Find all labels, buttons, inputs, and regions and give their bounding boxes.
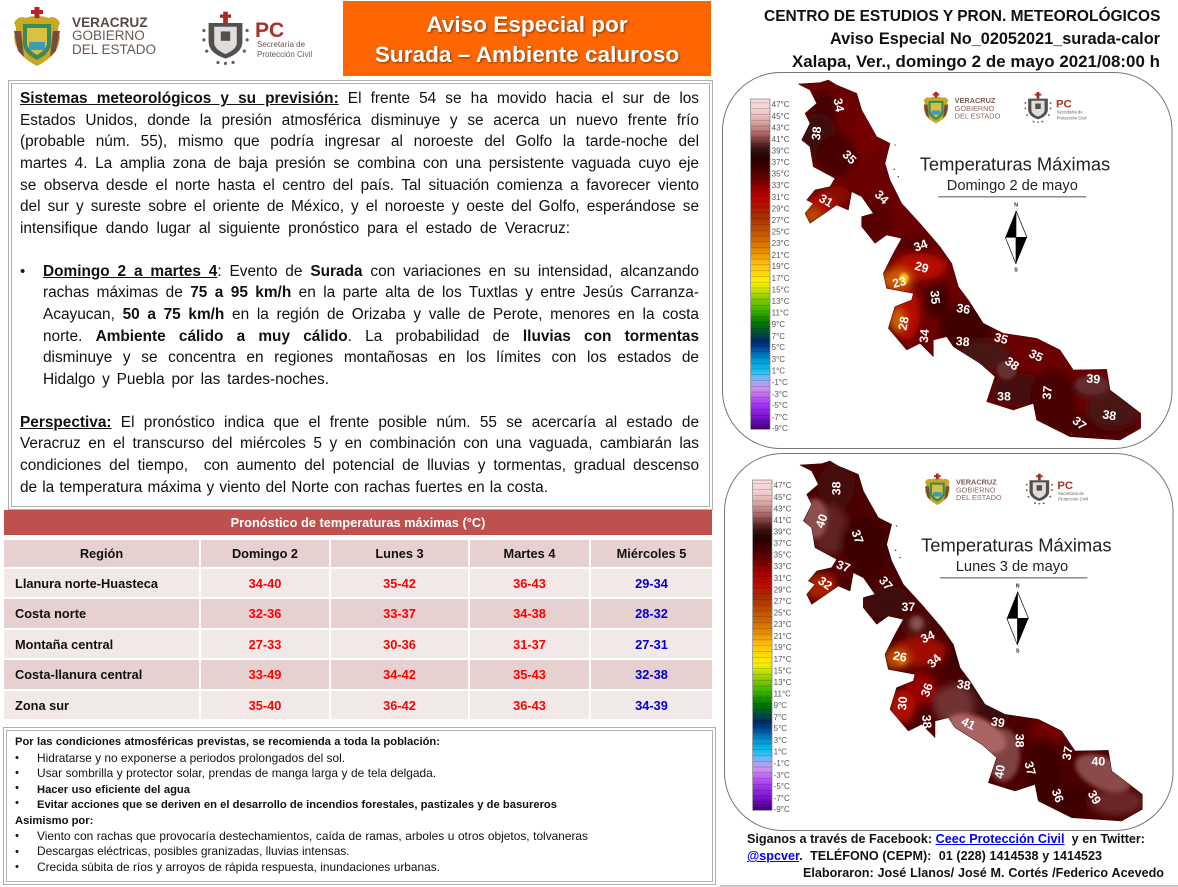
legend: temperature scale lunes: 7°C <box>774 713 787 722</box>
table title <box>4 510 712 535</box>
list: recommendations: Hidratarse y no exponerse a periodos prolongados del sol. <box>37 751 345 765</box>
legend: temperature scale: -9°C <box>772 424 788 433</box>
logo: Protección Civil: Secretaría de <box>257 40 305 49</box>
legend: temperature scale: 29°C <box>772 204 790 213</box>
table title: Pronóstico de temperaturas máximas (°C) <box>231 515 485 530</box>
logo: Veracruz Gobierno del Estado <box>14 7 156 66</box>
list: hazards: Descargas eléctricas, posibles granizadas, lluvias intensas. <box>37 844 350 858</box>
logo: Veracruz Gobierno del Estado: GOBIERNO <box>72 28 145 43</box>
title banner: Surada – Ambiente caluroso <box>375 42 679 67</box>
paragraph: sistemas meteorológicos: intensifique dando lugar al siguiente pronóstico para el estado de Veracruz: <box>20 220 570 237</box>
icon: north arrow lunes: S <box>1016 649 1020 655</box>
paragraph: sistemas meteorológicos: Sistemas meteorológicos y su previsión: El frente 54 se ha movido hacia el sur de los <box>20 90 699 107</box>
map logos domingo: Protección Civil <box>1057 115 1087 120</box>
legend: temperature scale lunes: 23°C <box>774 620 792 629</box>
legend: temperature scale: 19°C <box>772 262 790 271</box>
agency header: Aviso Especial No_02052021_surada-calor <box>830 30 1160 48</box>
paragraph: domingo 2 a martes 4: disminuye y se concentra en regiones montañosas en los límites con los estados de <box>43 349 699 366</box>
list: recommendations <box>15 751 557 811</box>
legend: temperature scale lunes <box>753 480 792 814</box>
legend: temperature scale lunes: 3°C <box>774 736 787 745</box>
logo: Protección Civil <box>202 12 312 65</box>
table: temperature forecast: 32-38 <box>635 667 668 682</box>
legend: temperature scale lunes: 27°C <box>774 597 792 606</box>
list: hazards: • <box>15 830 19 842</box>
temperature labels lunes: 38 <box>956 677 972 693</box>
legend: temperature scale lunes: 5°C <box>774 724 787 733</box>
table: temperature forecast: Región <box>80 546 123 561</box>
temperature labels domingo: 35 <box>1027 346 1045 365</box>
map title lunes <box>921 535 1112 578</box>
temperature labels domingo: 34 <box>912 237 930 255</box>
table: temperature forecast: 33-37 <box>383 606 416 621</box>
paragraph: domingo 2 a martes 4: • <box>20 263 25 280</box>
list: recommendations: Evitar acciones que se deriven en el desarrollo de incendios forestales, pastizales y de basureros <box>37 799 557 811</box>
map logos lunes: DEL ESTADO <box>956 493 1002 502</box>
temperature labels domingo: 38 <box>809 126 824 141</box>
temperature labels lunes: 37 <box>901 600 915 614</box>
legend: temperature scale: 33°C <box>772 181 790 190</box>
panel: map Domingo 2 de mayo <box>722 72 1172 449</box>
legend: temperature scale: 31°C <box>772 193 790 202</box>
temperature labels domingo: 38 <box>997 390 1011 404</box>
temperature labels lunes: 37 <box>1021 760 1039 777</box>
map logos domingo: Secretaría de <box>1057 110 1083 115</box>
legend: temperature scale lunes: 47°C <box>774 481 792 490</box>
legend: temperature scale: 11°C <box>772 308 789 317</box>
temperature labels domingo <box>809 97 1117 433</box>
table: temperature forecast: Miércoles 5 <box>617 546 686 561</box>
table: temperature forecast: 27-33 <box>249 636 281 652</box>
icon: north arrow domingo <box>1005 202 1027 274</box>
list: recommendations: Usar sombrilla y protector solar, prendas de manga larga y de tela delgada. <box>37 766 436 780</box>
legend: temperature scale: 27°C <box>772 216 790 225</box>
legend: temperature scale lunes: 35°C <box>774 550 792 559</box>
logo: Veracruz Gobierno del Estado: DEL ESTADO <box>72 42 156 57</box>
legend: temperature scale lunes: 25°C <box>774 608 792 617</box>
list: hazards: Viento con rachas que provocaría destechamientos, caída de ramas, arboles u otros objetos, tolvaneras <box>37 829 588 843</box>
logo: Protección Civil: Protección Civil <box>257 50 312 59</box>
paragraph: perspectiva: Perspectiva: El pronóstico indica que el frente posible núm. 55 se acercaría al estado de <box>20 414 699 431</box>
list: hazards: • <box>15 846 19 858</box>
map: Veracruz temperature lunes <box>787 455 1153 825</box>
list: hazards: • <box>15 861 19 873</box>
table: temperature forecast: 34-40 <box>249 576 281 590</box>
table: temperature forecast: 28-32 <box>635 606 668 621</box>
temperature labels lunes <box>813 481 1105 807</box>
table: temperature forecast: 30-36 <box>383 636 416 652</box>
map logos domingo <box>924 92 1087 123</box>
map: Veracruz temperature domingo <box>787 77 1153 447</box>
temperature labels lunes: 37 <box>834 557 852 575</box>
paragraph: domingo 2 a martes 4: rachas máximas de 75 a 95 km/h en la parte alta de los Tuxtlas y entre Jesús Carranza- <box>43 284 699 301</box>
title banner <box>343 1 711 76</box>
agency header: Xalapa, Ver., domingo 2 de mayo 2021/08:00 h <box>792 52 1160 71</box>
temperature labels lunes: 37 <box>848 528 866 546</box>
paragraph: sistemas meteorológicos: (probable núm. 55), mismo que podría ingresar al noroeste del Golfo la tarde-noche del <box>20 133 699 150</box>
temperature labels lunes: 40 <box>992 764 1008 780</box>
legend: temperature scale lunes: 33°C <box>774 562 792 571</box>
panel: recommendations: Por las condiciones atmosféricas previstas, se recomienda a toda la población: <box>15 736 440 748</box>
temperature labels domingo: 29 <box>913 259 930 276</box>
temperature labels lunes: 37 <box>876 574 896 593</box>
paragraph: perspectiva: de la temperatura máxima y viento del Norte con rachas fuertes en la costa. <box>20 479 548 496</box>
logo: Protección Civil: PC <box>255 19 284 42</box>
legend: temperature scale: 25°C <box>772 227 790 236</box>
temperature labels lunes: 41 <box>959 714 978 733</box>
legend: temperature scale: 39°C <box>772 146 790 155</box>
legend: temperature scale lunes: 37°C <box>774 539 792 548</box>
panel: forecast text <box>8 80 713 510</box>
table: temperature forecast: 33-49 <box>249 667 281 682</box>
table: temperature forecast: 36-43 <box>513 576 546 590</box>
paragraph: perspectiva: Veracruz en el transcurso del miércoles 5 y en combinación con una vaguada, cambiarán las <box>20 435 699 452</box>
temperature labels domingo: 37 <box>1070 414 1089 433</box>
temperature labels lunes: 39 <box>990 714 1006 730</box>
legend: temperature scale lunes: -9°C <box>774 805 790 814</box>
paragraph: domingo 2 a martes 4 <box>20 263 699 388</box>
legend: temperature scale lunes: 9°C <box>774 701 787 710</box>
temperature labels domingo: 23 <box>891 274 908 291</box>
list: recommendations: • <box>15 767 19 779</box>
table: temperature forecast: 29-34 <box>635 576 668 590</box>
legend: temperature scale lunes: 31°C <box>774 574 792 583</box>
temperature labels lunes: 38 <box>1012 734 1026 748</box>
temperature labels domingo: 31 <box>817 191 836 210</box>
legend: temperature scale lunes: 29°C <box>774 585 792 594</box>
legend: temperature scale lunes: 19°C <box>774 643 792 652</box>
temperature labels lunes: 40 <box>813 512 831 530</box>
legend: temperature scale lunes: 21°C <box>774 632 792 641</box>
temperature labels lunes: 34 <box>925 651 944 671</box>
table: temperature forecast: 36-43 <box>513 698 546 712</box>
table: temperature forecast: Montaña central <box>15 636 113 652</box>
table: temperature forecast <box>4 540 712 719</box>
table: temperature forecast: 35-42 <box>383 576 416 590</box>
legend: temperature scale: 23°C <box>772 239 790 248</box>
paragraph: domingo 2 a martes 4: Domingo 2 a martes 4: Evento de Surada con variaciones en su intensidad, alcanzando <box>43 263 699 280</box>
list: hazards <box>15 829 588 874</box>
legend: temperature scale lunes: -7°C <box>774 794 790 803</box>
table: temperature forecast: 35-43 <box>513 667 546 682</box>
temperature labels lunes: 38 <box>919 714 934 729</box>
temperature labels domingo: 37 <box>1040 385 1055 400</box>
paragraph: domingo 2 a martes 4: Hidalgo y Puebla por las tardes-noches. <box>43 371 329 388</box>
title banner: Aviso Especial por <box>426 12 628 37</box>
map logos lunes: VERACRUZ <box>956 478 997 487</box>
icon: north arrow domingo: S <box>1014 268 1018 274</box>
temperature labels lunes: 39 <box>1085 788 1104 807</box>
map title domingo <box>920 154 1110 197</box>
map title lunes: Lunes 3 de mayo <box>956 559 1068 575</box>
table: temperature forecast: Martes 4 <box>504 546 555 561</box>
legend: temperature scale: 3°C <box>772 355 785 364</box>
paragraph: domingo 2 a martes 4: norte. Ambiente cálido a muy cálido. La probabilidad de lluvias con tormentas <box>43 328 699 345</box>
map logos lunes: Secretaría de <box>1058 491 1085 496</box>
list: recommendations: • <box>15 797 19 809</box>
temperature labels domingo: 35 <box>840 148 859 167</box>
table: temperature forecast: 32-36 <box>249 606 281 621</box>
table: temperature forecast: Costa norte <box>15 606 86 621</box>
temperature labels domingo: 34 <box>872 188 892 207</box>
map logos domingo: GOBIERNO <box>955 104 994 113</box>
temperature labels domingo: 38 <box>1101 407 1117 423</box>
paragraph: sistemas meteorológicos <box>20 90 699 237</box>
temperature labels lunes: 30 <box>895 696 910 711</box>
temperature labels domingo: 34 <box>831 97 847 113</box>
table: temperature forecast: 34-39 <box>635 698 668 712</box>
legend: temperature scale: 17°C <box>772 274 790 283</box>
map logos domingo: PC <box>1056 98 1072 110</box>
map logos domingo: DEL ESTADO <box>955 111 1001 120</box>
legend: temperature scale lunes: 13°C <box>774 678 792 687</box>
legend: temperature scale: -3°C <box>772 390 788 399</box>
legend: temperature scale: -1°C <box>772 378 788 387</box>
table: temperature forecast: 36-42 <box>383 698 416 712</box>
paragraph: domingo 2 a martes 4: Acayucan, 50 a 75 km/h en la región de Orizaba y valle de Perote, menores en la costa <box>43 306 699 323</box>
footer: contact and credits <box>747 832 1164 880</box>
footer: contact and credits: Elaboraron: José Llanos/ José M. Cortés /Federico Acevedo <box>803 866 1164 880</box>
legend: temperature scale: 13°C <box>772 297 790 306</box>
legend: temperature scale: 45°C <box>772 112 790 121</box>
temperature labels lunes: 36 <box>918 681 936 699</box>
agency header <box>764 6 1160 71</box>
temperature labels domingo: 34 <box>917 328 932 343</box>
paragraph: sistemas meteorológicos: martes 4. La amplia zona de baja presión se combina con una persistente vaguada cuyo eje <box>20 155 699 172</box>
legend: temperature scale lunes: 11°C <box>774 689 791 698</box>
temperature labels lunes: 36 <box>1049 787 1067 805</box>
paragraph: sistemas meteorológicos: se observa desde el norte hasta el centro del país. Tal situación comienza a favorecer viento <box>20 177 699 194</box>
temperature labels lunes: 40 <box>1091 755 1105 769</box>
paragraph: sistemas meteorológicos: Estados Unidos, donde la presión atmosférica disminuye y se acerca un nuevo frente frío <box>20 112 699 129</box>
legend: temperature scale lunes: -3°C <box>774 771 790 780</box>
agency header: CENTRO DE ESTUDIOS Y PRON. METEOROLÓGICOS <box>764 8 1160 25</box>
logo: Veracruz Gobierno del Estado: VERACRUZ <box>72 15 148 30</box>
temperature labels lunes: 37 <box>1060 745 1076 761</box>
map logos domingo: VERACRUZ <box>955 96 996 105</box>
table: temperature forecast: 35-40 <box>249 698 281 712</box>
legend: temperature scale: 5°C <box>772 343 785 352</box>
table: temperature forecast: 31-37 <box>513 636 546 652</box>
legend: temperature scale lunes: 39°C <box>774 527 792 536</box>
map title lunes: Temperaturas Máximas <box>921 535 1112 556</box>
legend: temperature scale lunes: 41°C <box>774 516 792 525</box>
temperature labels domingo: 38 <box>955 334 970 349</box>
panel: recommendations: Asimismo por: <box>15 815 93 827</box>
map logos lunes: PC <box>1057 480 1073 492</box>
temperature labels lunes: 32 <box>815 574 835 593</box>
legend: temperature scale: 21°C <box>772 251 790 260</box>
table: temperature forecast: 27-31 <box>635 636 668 652</box>
legend: temperature scale: 47°C <box>772 100 790 109</box>
list: hazards: Crecida súbita de ríos y arroyos de rápida respuesta, inundaciones urbanas. <box>37 860 440 874</box>
icon: north arrow lunes <box>1007 583 1028 655</box>
legend: temperature scale lunes: 15°C <box>774 666 792 675</box>
legend: temperature scale: 37°C <box>772 158 790 167</box>
list: recommendations: Hacer uso eficiente del agua <box>37 784 190 796</box>
table: temperature forecast: 34-38 <box>513 606 546 621</box>
footer: contact and credits: @spcver. TELÉFONO (CEPM): 01 (228) 1414538 y 1414523 <box>747 849 1102 863</box>
map title domingo: Temperaturas Máximas <box>920 154 1110 175</box>
legend: temperature scale <box>751 99 790 433</box>
temperature labels domingo: 38 <box>1002 354 1022 373</box>
legend: temperature scale: -7°C <box>772 413 788 422</box>
panel: map Lunes 3 de mayo <box>724 453 1174 831</box>
temperature labels domingo: 28 <box>896 315 912 331</box>
map logos lunes: Protección Civil <box>1058 497 1088 502</box>
table: temperature forecast: Domingo 2 <box>232 546 298 561</box>
icon: north arrow lunes: N <box>1016 583 1020 589</box>
legend: temperature scale: 43°C <box>772 123 790 132</box>
map logos lunes <box>925 473 1088 505</box>
legend: temperature scale: 1°C <box>772 366 785 375</box>
temperature labels lunes: 34 <box>918 628 937 646</box>
legend: temperature scale lunes: 45°C <box>774 493 792 502</box>
legend: temperature scale: -5°C <box>772 401 788 410</box>
legend: temperature scale lunes: -1°C <box>774 759 790 768</box>
paragraph: perspectiva <box>20 414 699 496</box>
legend: temperature scale: 35°C <box>772 169 790 178</box>
map title domingo: Domingo 2 de mayo <box>947 178 1078 194</box>
legend: temperature scale: 7°C <box>772 332 785 341</box>
legend: temperature scale lunes: -5°C <box>774 782 790 791</box>
temperature labels domingo: 36 <box>955 301 971 317</box>
list: recommendations: • <box>15 752 19 764</box>
footer: contact and credits: Siganos a través de Facebook: Ceec Protección Civil y en Twitter: <box>747 832 1145 846</box>
icon: north arrow domingo: N <box>1014 202 1018 208</box>
list: recommendations: • <box>15 782 19 794</box>
map logos lunes: GOBIERNO <box>956 486 996 495</box>
legend: temperature scale: 9°C <box>772 320 785 329</box>
temperature labels domingo: 39 <box>1086 371 1101 387</box>
paragraph: perspectiva: condiciones del tiempo, con aumento del potencial de lluvias y tormentas, gradual descenso <box>20 457 699 474</box>
table: temperature forecast: Lunes 3 <box>375 546 424 561</box>
legend: temperature scale lunes: 17°C <box>774 655 792 664</box>
legend: temperature scale: 41°C <box>772 135 790 144</box>
temperature labels lunes: 26 <box>892 649 908 665</box>
panel: recommendations <box>3 727 716 885</box>
temperature labels domingo: 35 <box>993 330 1010 347</box>
paragraph: sistemas meteorológicos: del sur y sureste sobre el oriente de México, y el noroeste y oeste del Golfo, esperándose se <box>20 198 699 215</box>
temperature labels domingo: 35 <box>927 290 943 305</box>
temperature labels lunes: 38 <box>829 481 843 495</box>
legend: temperature scale lunes: 43°C <box>774 504 792 513</box>
table: temperature forecast: Llanura norte-Huasteca <box>15 576 158 590</box>
table: temperature forecast: Costa-llanura central <box>15 667 142 682</box>
legend: temperature scale: 15°C <box>772 285 790 294</box>
table: temperature forecast: Zona sur <box>15 698 69 712</box>
table: temperature forecast: 34-42 <box>383 667 416 682</box>
legend: temperature scale lunes: 1°C <box>774 747 787 756</box>
